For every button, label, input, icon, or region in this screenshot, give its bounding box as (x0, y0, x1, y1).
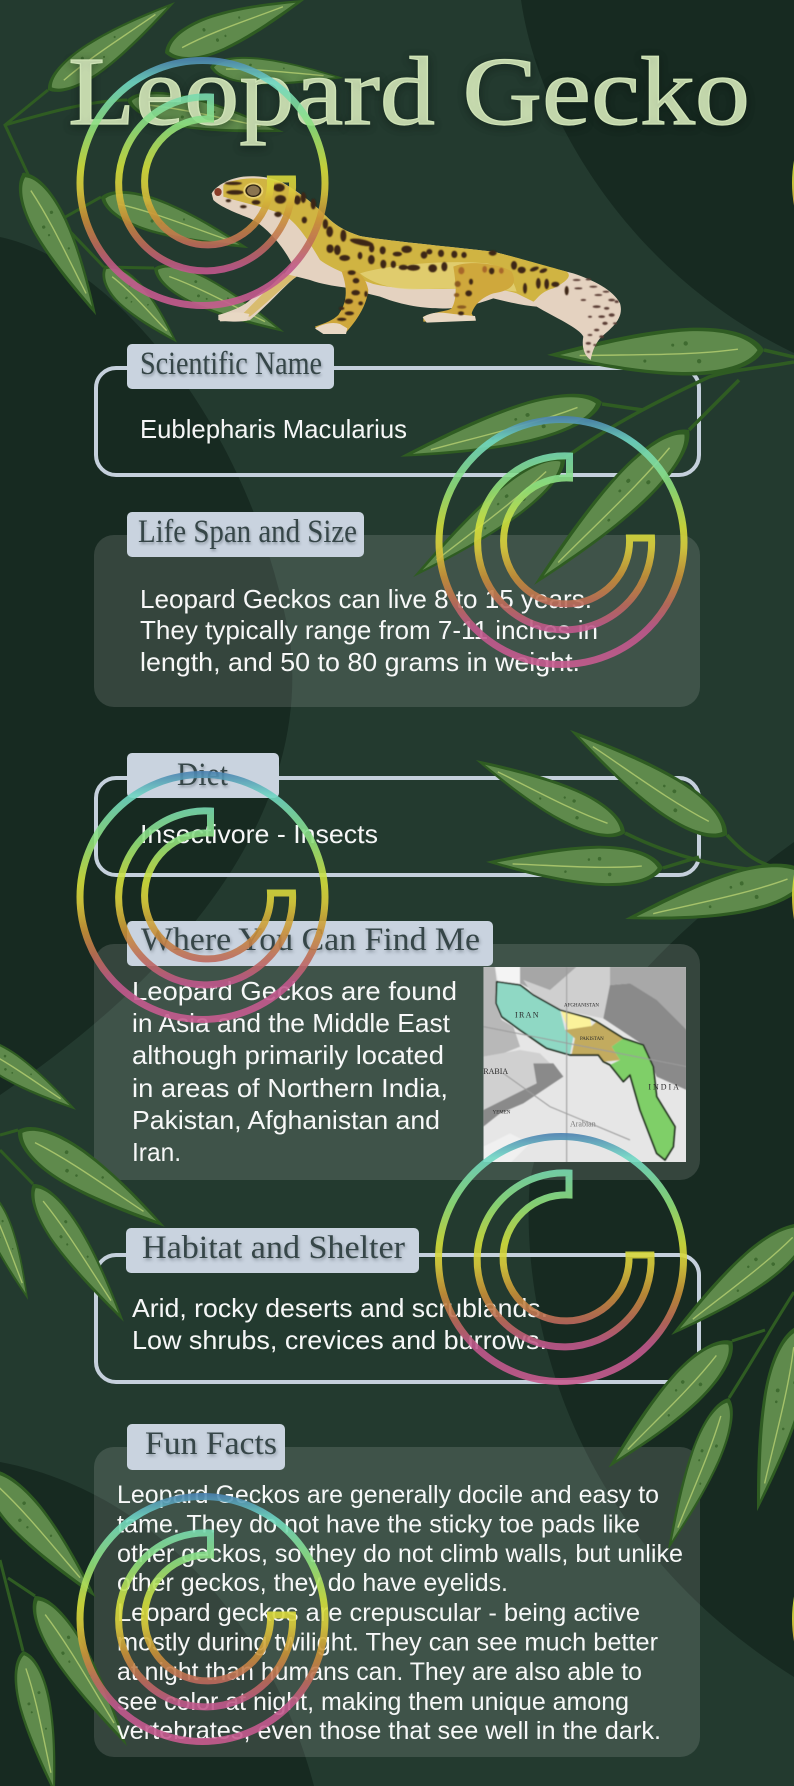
map labels: IRAN (515, 1011, 540, 1020)
text: life span: length, and 50 to 80 grams in weight. (140, 647, 580, 677)
map labels: YEMEN (493, 1110, 511, 1115)
label: habitat and shelter: Habitat and Shelter (142, 1230, 405, 1266)
gecko photo illustration (212, 176, 621, 360)
gecko front hand (218, 312, 249, 321)
gecko eye (243, 183, 263, 199)
text: fun facts: vertebrates, even those that see well in the dark. (117, 1717, 661, 1745)
text: range: in Asia and the Middle East (132, 1008, 451, 1038)
text: fun facts: Leopard geckos are crepuscular - being active (117, 1599, 640, 1627)
map labels: INDIA (648, 1082, 681, 1091)
text: fun facts: other geckos, they do have eyelids. (117, 1569, 508, 1597)
text: life span: Leopard Geckos can live 8 to 15 years. (140, 584, 592, 614)
text: life span (140, 584, 598, 677)
label: habitat and shelter (126, 1228, 419, 1273)
label: fun facts: Fun Facts (145, 1426, 277, 1462)
text: range: although primarily located (132, 1040, 444, 1070)
leaves: lower right branch (595, 1210, 794, 1556)
panel: scientific name outline (96, 368, 699, 475)
map labels (483, 1004, 681, 1129)
text: range: Iran. (132, 1137, 181, 1167)
panel: diet outline (96, 778, 699, 875)
text: fun facts: at night than humans can. They are also able to (117, 1658, 642, 1686)
panel: habitat outline (96, 1255, 699, 1382)
gecko front leg (315, 270, 368, 332)
text: range: Pakistan, Afghanistan and (132, 1105, 440, 1135)
gecko front arm (242, 273, 297, 317)
text: fun facts (117, 1481, 683, 1745)
gecko scales highlight (360, 262, 517, 292)
text: fun facts: see color at night, making them unique among (117, 1688, 629, 1716)
leaves: upper right branch (395, 326, 794, 599)
label: life span and size: Life Span and Size (138, 514, 357, 550)
map labels: RABIA (483, 1067, 508, 1076)
label: where you can find me: Where You Can Find Me (141, 922, 480, 958)
text: habitat: Arid, rocky deserts and scrublands. (132, 1293, 548, 1323)
text: fun facts: tame. They do not have the sticky toe pads like (117, 1510, 640, 1538)
panel: where you can find me fill (94, 944, 700, 1180)
gecko nostril (214, 188, 222, 196)
gecko body (212, 176, 621, 360)
text: habitat (132, 1293, 548, 1355)
label: fun facts (127, 1424, 285, 1470)
leaves: middle right branch (468, 713, 794, 940)
panel: life span fill (94, 535, 700, 707)
gecko back (223, 178, 569, 302)
label: diet: Diet (177, 757, 228, 793)
gecko spots (225, 182, 619, 353)
panel: fun facts fill (94, 1447, 700, 1757)
gecko rear leg (423, 263, 514, 322)
map labels: PAKISTAN (580, 1037, 604, 1042)
text: range: in areas of Northern India, (132, 1073, 448, 1103)
map of range (483, 967, 687, 1163)
leaves: middle left branch (0, 1028, 176, 1331)
gecko rear foot (423, 313, 476, 323)
text: diet: Insectivore - Insects (140, 819, 378, 849)
text: range: Leopard Geckos are found (132, 976, 457, 1006)
text: scientific name: Eublepharis Macularius (140, 414, 407, 444)
text: habitat: Low shrubs, crevices and burrows. (132, 1325, 547, 1355)
label: scientific name: Scientific Name (140, 346, 322, 382)
text: fun facts: Leopard Geckos are generally docile and easy to (117, 1481, 659, 1509)
leaves: top left branch (5, 0, 345, 353)
text: fun facts: mostly during twilight. They can see much better (117, 1629, 658, 1657)
label: scientific name (127, 344, 334, 389)
gecko front foot (315, 323, 347, 334)
leaves: bottom left branch (0, 1458, 142, 1786)
title: Leopard Gecko (68, 38, 750, 145)
text: fun facts: other geckos, so they do not climb walls, but unlike (117, 1540, 683, 1568)
map labels: AFGHANISTAN (564, 1004, 599, 1009)
text: range (132, 976, 457, 1167)
label: diet (127, 753, 279, 798)
text: life span: They typically range from 7-11 inches in (140, 615, 598, 645)
map labels: Arabian (570, 1120, 596, 1129)
